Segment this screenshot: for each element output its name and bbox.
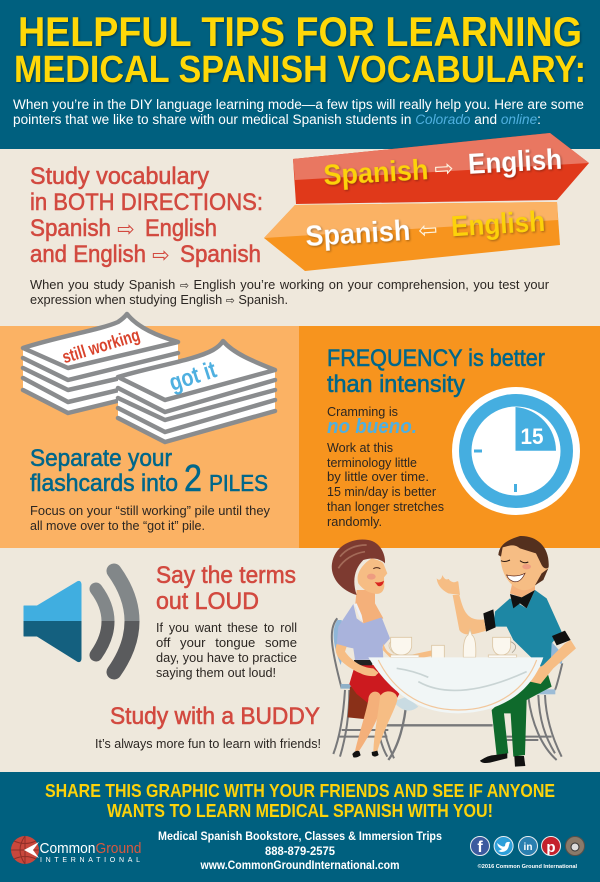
man's chair [507, 663, 562, 760]
heading: separate flashcards: Separate your [30, 445, 172, 472]
copyright: ©2016 Common Ground International [478, 863, 578, 870]
heading: say the terms: out LOUD [156, 588, 259, 615]
arrow: Spanish to English: ⇨ [434, 156, 454, 183]
heading: study vocabulary: ⇨ [117, 217, 135, 241]
contact information: 888-879-2575 [265, 844, 335, 858]
man [437, 536, 576, 767]
icon: still working pile [23, 314, 178, 413]
icon: linkedin: in [524, 842, 532, 853]
heading: separate flashcards: flashcards into [30, 470, 178, 497]
heading: frequency: than intensity [327, 371, 465, 398]
logo [11, 836, 142, 864]
panel: say out loud and buddy [0, 536, 600, 773]
body text: say the terms: saying them out loud! [156, 665, 276, 680]
icon: facebook: f [477, 839, 483, 856]
woman's chair [332, 618, 394, 758]
arrow: English to Spanish: English [450, 206, 546, 243]
body text: flashcards: all move over to the “got it” pile. [30, 518, 205, 533]
icon: speaker [24, 571, 132, 672]
icon: clock: 15 [520, 424, 544, 449]
panel: footer [0, 772, 600, 882]
heading: separate flashcards: 2 [184, 458, 202, 500]
arrow: Spanish to English: English [467, 144, 563, 181]
heading: frequency: FREQUENCY is better [327, 345, 545, 372]
logo: INTERNATIONAL [40, 857, 140, 864]
heading: study vocabulary: Spanish [30, 215, 111, 242]
arrow: Spanish to English [293, 133, 589, 204]
body text: cramming [327, 404, 444, 529]
body text: buddy: It’s always more fun to learn with friends! [95, 736, 321, 751]
woman's hand [358, 668, 379, 676]
body text: cramming: no bueno. [327, 416, 417, 438]
body text: directions: expression when studying English ⇨ Spanish. [30, 292, 288, 307]
body text: say the terms: If you want these to roll [156, 620, 297, 635]
body text: flashcards: Focus on your “still working” pile until they [30, 503, 270, 518]
body text: say the terms [156, 620, 297, 680]
body text: cramming: 15 min/day is better [327, 484, 437, 499]
panel: both directions [0, 133, 600, 326]
intro text: pointers that we like to share with our medical Spanish students in Colorado and online: [13, 112, 541, 127]
icon: pinterest: p [546, 839, 556, 856]
body text: cramming: by little over time. [327, 469, 429, 484]
social icons [470, 836, 584, 856]
icon: clock [452, 387, 580, 515]
arrow: English to Spanish: ⇦ [418, 217, 438, 244]
label: got it: got it [166, 356, 220, 397]
icon: got it pile [118, 341, 275, 442]
illustration: two friends at a cafe table [332, 536, 576, 767]
body text: cramming: terminology little [327, 455, 417, 470]
woman [332, 539, 440, 758]
heading: frequency [327, 345, 545, 398]
heading: separate flashcards: PILES [209, 470, 268, 496]
arrow: English to Spanish [264, 202, 560, 271]
arrow: Spanish to English: Spanish [323, 154, 429, 192]
heading: study vocabulary: Spanish [180, 241, 261, 268]
heading: say the terms [156, 562, 296, 615]
contact information: www.CommonGroundInternational.com [200, 858, 400, 872]
label: still working: still working [60, 325, 142, 367]
body text: cramming: than longer stretches [327, 499, 444, 514]
body text: directions [30, 277, 550, 307]
panel: frequency [299, 326, 600, 548]
body text: say the terms: off your tongue some [156, 635, 297, 650]
icon: twitter [494, 836, 513, 856]
body text: flashcards [30, 503, 270, 533]
table legs [387, 698, 493, 760]
tablecloth [368, 657, 543, 713]
title [14, 8, 586, 91]
contact information: Medical Spanish Bookstore, Classes & Immersion Trips [158, 829, 442, 843]
body text: cramming: Cramming is [327, 404, 398, 419]
body text: cramming: randomly. [327, 514, 382, 529]
panel: flashcards [0, 314, 299, 548]
body text: cramming: Work at this [327, 440, 393, 455]
heading: study with a buddy: Study with a BUDDY [110, 703, 320, 730]
tableware [389, 629, 517, 658]
intro text: When you’re in the DIY language learning mode—a few tips will really help you. Here are some [13, 97, 584, 112]
heading: separate flashcards [30, 445, 268, 500]
panel: header [0, 0, 600, 150]
heading: study vocabulary [30, 163, 263, 268]
heading: study vocabulary: and English [30, 241, 146, 268]
heading: study vocabulary: ⇨ [152, 243, 170, 267]
call to action [45, 781, 555, 821]
heading: study vocabulary: Study vocabulary [30, 163, 209, 190]
body text: directions: When you study Spanish ⇨ English you’re working on your comprehension, you test your [30, 277, 550, 292]
call to action: WANTS TO LEARN MEDICAL SPANISH WITH YOU! [107, 801, 493, 821]
arrow: English to Spanish: Spanish [305, 215, 411, 253]
icon: globe [11, 836, 39, 864]
logo: CommonGround [40, 840, 142, 857]
heading: study vocabulary: English [145, 215, 217, 242]
heading: say the terms: Say the terms [156, 562, 296, 589]
contact information [158, 829, 442, 872]
body text: say the terms: day, you have to practice [156, 650, 297, 665]
heading: study vocabulary: in BOTH DIRECTIONS: [30, 189, 263, 216]
icon: instagram [566, 836, 584, 856]
intro text [13, 97, 584, 127]
